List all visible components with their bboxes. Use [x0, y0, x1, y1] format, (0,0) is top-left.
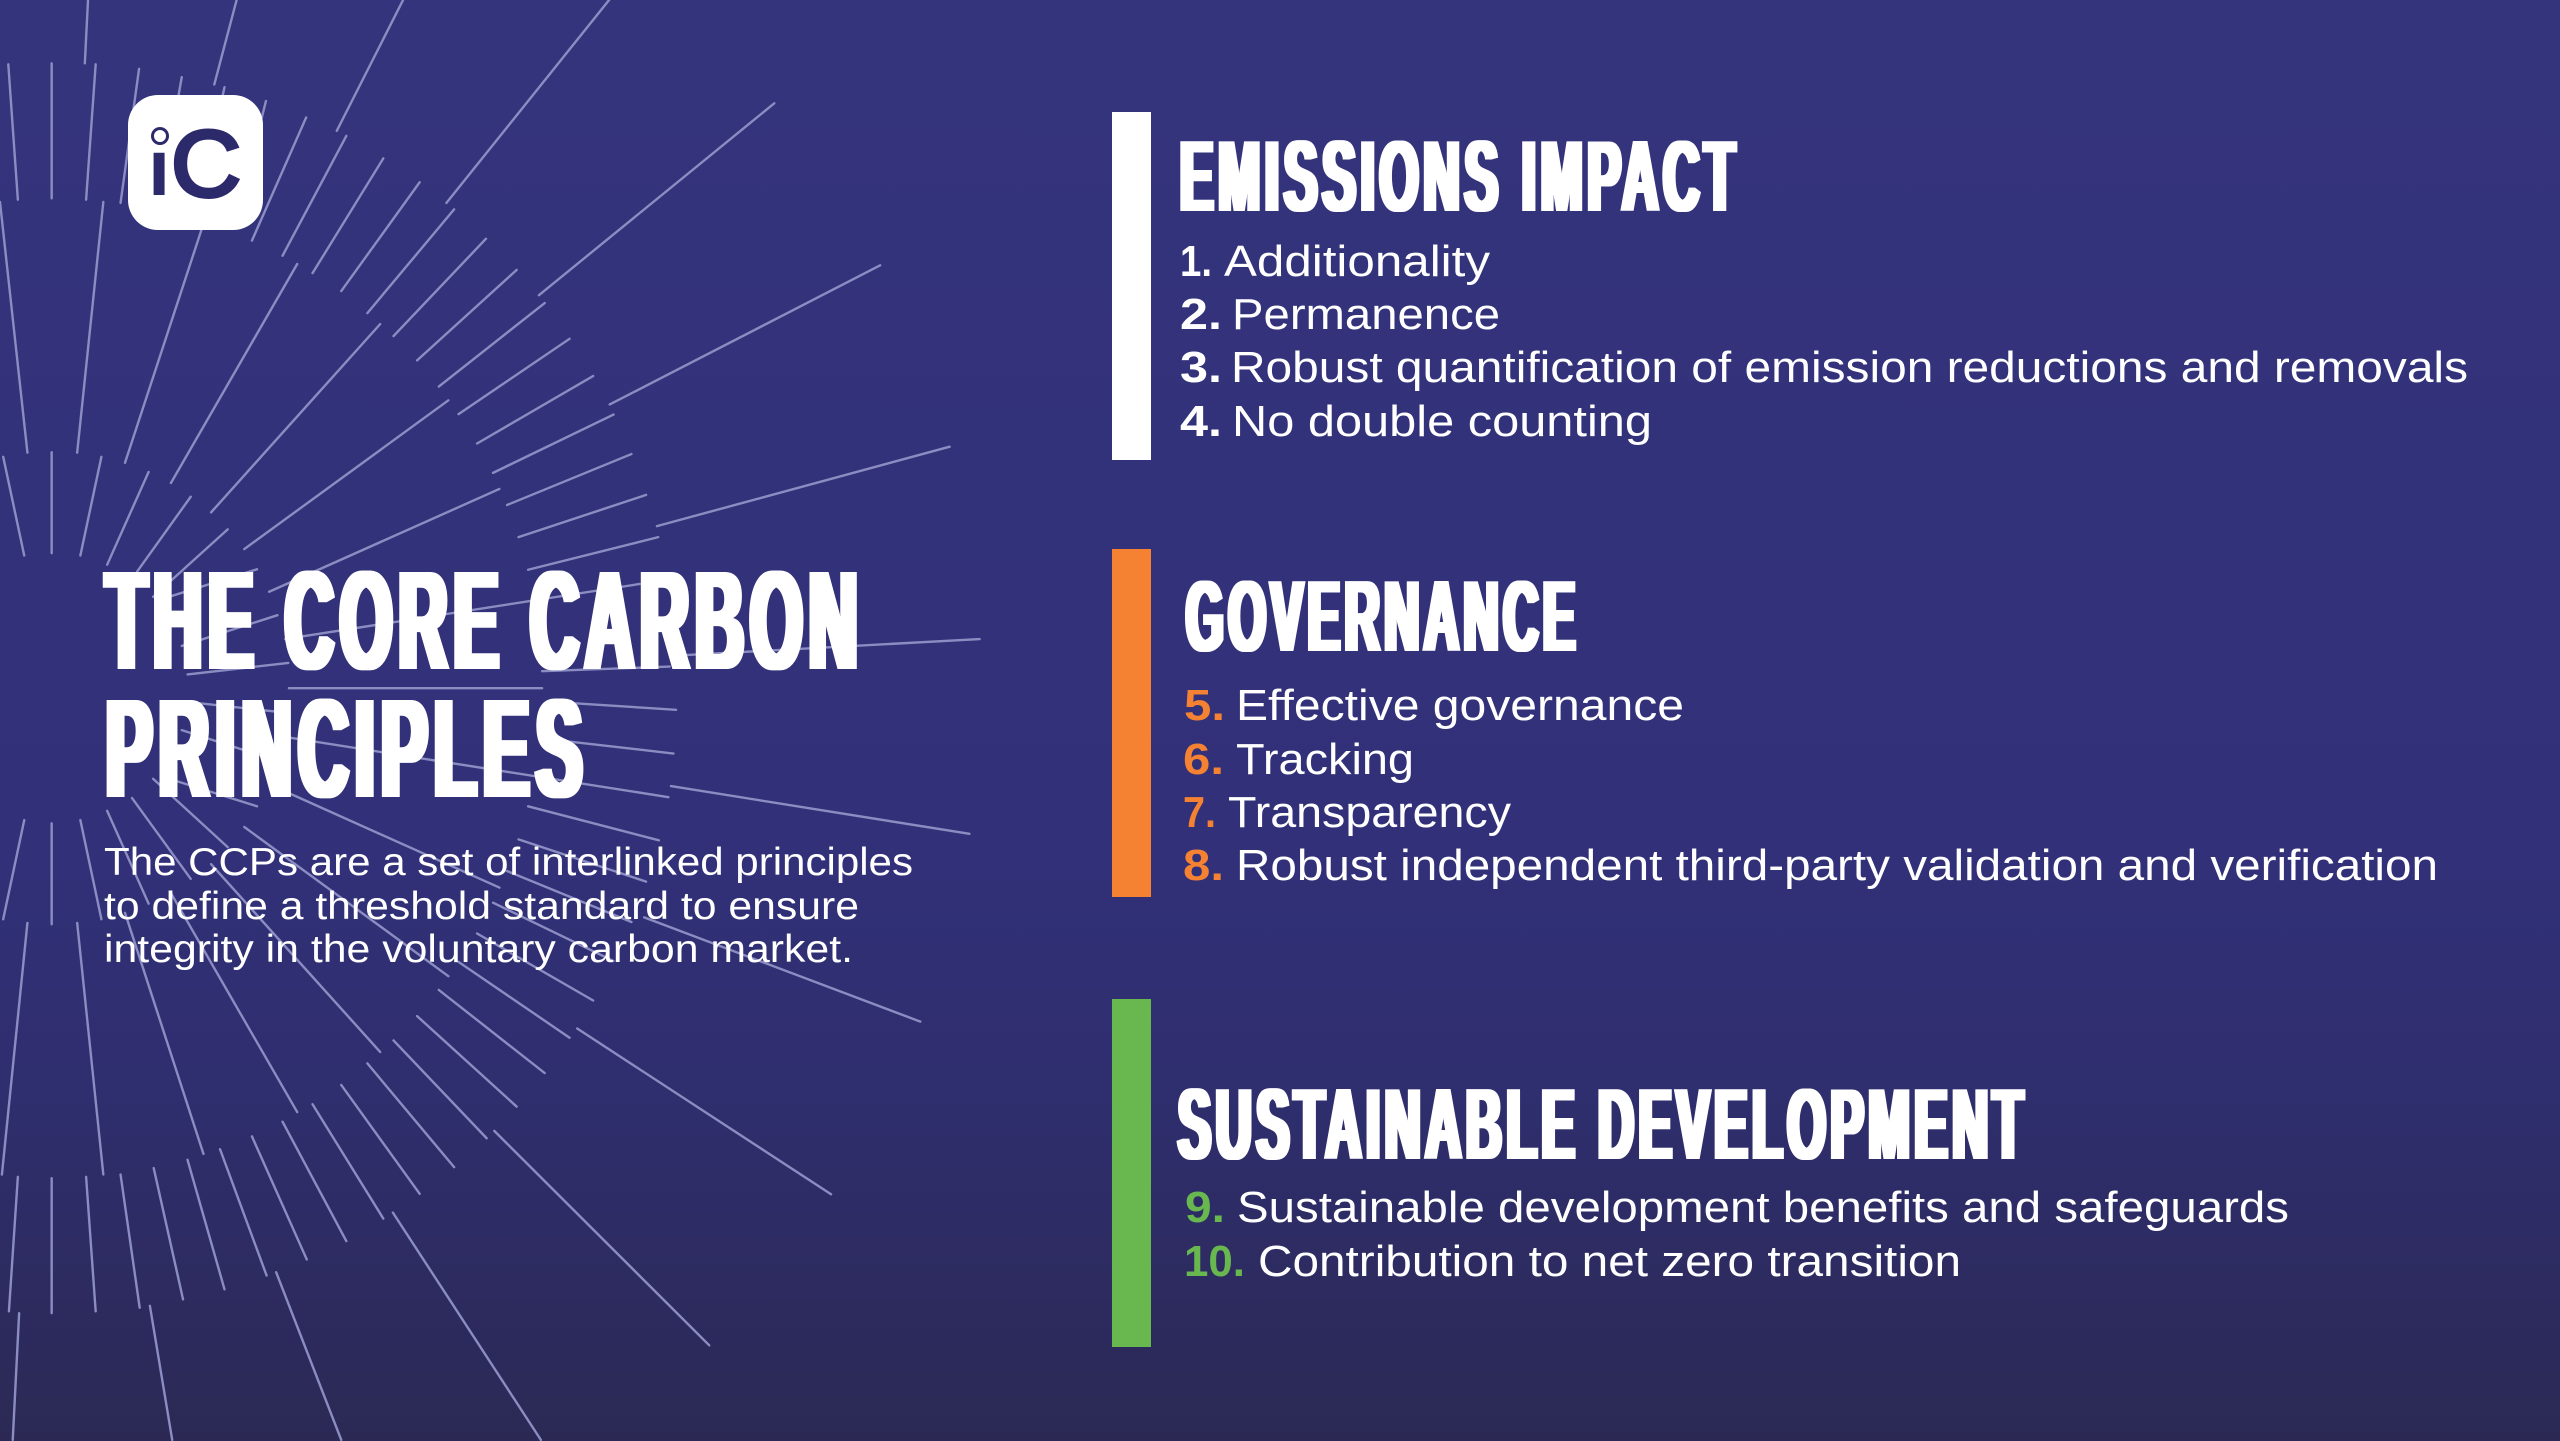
list: principles 9 and 10: 10.	[1184, 1237, 1245, 1286]
list: principles 1 to 4: 4.	[1180, 397, 1222, 446]
intro paragraph: The CCPs are a set of interlinked principles	[104, 841, 913, 884]
list: principles 5 to 8: Effective governance	[1236, 681, 1684, 730]
panel: emissions impact: EMISSIONS IMPACT	[1180, 121, 1740, 233]
list: principles 1 to 4: Additionality	[1224, 237, 1490, 286]
list: principles 1 to 4: 3.	[1180, 343, 1222, 392]
list: principles 5 to 8: Tracking	[1236, 735, 1414, 784]
list: principles 5 to 8: 6.	[1183, 735, 1224, 784]
list: principles 9 and 10: Sustainable development benefits and safeguards	[1237, 1183, 2289, 1232]
list: principles 1 to 4: 1.	[1180, 237, 1212, 286]
text: THE CORE CARBON	[106, 541, 864, 699]
list: principles 5 to 8: Transparency	[1228, 788, 1511, 837]
panel: governance: GOVERNANCE	[1186, 561, 1580, 673]
logo: iC	[128, 95, 263, 230]
list: principles 1 to 4: 2.	[1180, 290, 1222, 339]
panel: sustainable development	[1112, 999, 2289, 1347]
list: principles 1 to 4: No double counting	[1232, 397, 1652, 446]
list: principles 1 to 4: Robust quantification of emission reductions and removals	[1231, 343, 2468, 392]
orange bar	[1112, 549, 1151, 897]
list: principles 1 to 4	[1180, 237, 2468, 446]
intro paragraph: integrity in the voluntary carbon market.	[104, 928, 853, 971]
logo: iC: i	[148, 123, 170, 212]
title: PRINCIPLES	[106, 669, 589, 827]
list: principles 5 to 8: 5.	[1184, 681, 1225, 730]
intro paragraph: to define a threshold standard to ensure	[104, 885, 859, 928]
list: principles 5 to 8: 7.	[1183, 788, 1216, 837]
list: principles 5 to 8: Robust independent third-party validation and verification	[1236, 841, 2438, 890]
green bar	[1112, 999, 1151, 1347]
panel: governance	[1112, 549, 2438, 897]
title	[106, 541, 864, 827]
list: principles 5 to 8	[1183, 681, 2438, 890]
intro paragraph	[104, 841, 913, 971]
list: principles 9 and 10: Contribution to net zero transition	[1258, 1237, 1961, 1286]
list: principles 9 and 10: 9.	[1185, 1183, 1225, 1232]
panel: emissions impact	[1112, 112, 2468, 460]
logo: iC: C	[171, 111, 241, 216]
list: principles 5 to 8: 8.	[1183, 841, 1224, 890]
list: principles 9 and 10	[1184, 1183, 2289, 1286]
white bar	[1112, 112, 1151, 460]
sunburst rays	[0, 0, 980, 1440]
list: principles 1 to 4: Permanence	[1232, 290, 1500, 339]
